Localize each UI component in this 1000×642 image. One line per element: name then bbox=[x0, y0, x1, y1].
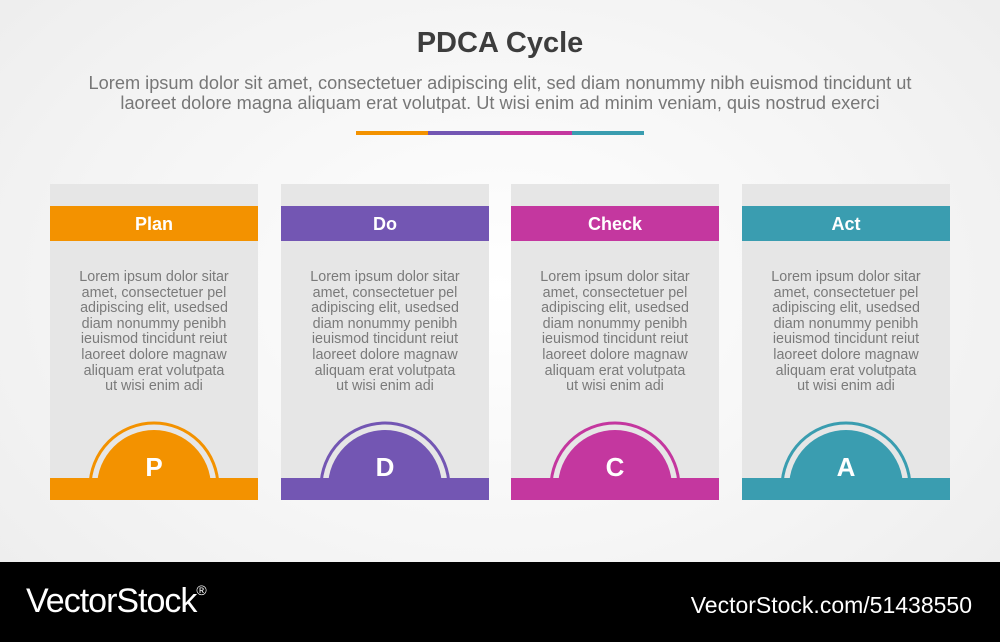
text: act: adipiscing elit, usedsed bbox=[772, 300, 920, 316]
text: plan: adipiscing elit, usedsed bbox=[80, 300, 228, 316]
text: check: ieuismod tincidunt reiut bbox=[542, 331, 688, 347]
panel: plan bbox=[50, 184, 258, 500]
panel: do bbox=[281, 184, 489, 500]
text: plan: amet, consectetuer pel bbox=[82, 285, 226, 301]
heading: act: Act bbox=[831, 214, 860, 234]
subtitle bbox=[89, 73, 912, 113]
text: do: aliquam erat volutpata bbox=[315, 363, 455, 379]
panel: act bbox=[742, 184, 950, 500]
text: do: Lorem ipsum dolor sitar bbox=[310, 269, 460, 285]
text: check: adipiscing elit, usedsed bbox=[541, 300, 689, 316]
text: act: ieuismod tincidunt reiut bbox=[773, 331, 919, 347]
text: plan: ieuismod tincidunt reiut bbox=[81, 331, 227, 347]
letter: C: C bbox=[606, 452, 624, 482]
heading: plan: Plan bbox=[135, 214, 173, 234]
text: plan bbox=[79, 269, 229, 394]
text: do bbox=[310, 269, 460, 394]
text: plan: diam nonummy penibh bbox=[82, 316, 226, 332]
panel: check bbox=[511, 184, 719, 500]
text: plan: Lorem ipsum dolor sitar bbox=[79, 269, 229, 285]
text: act: aliquam erat volutpata bbox=[776, 363, 916, 379]
letter: P: P bbox=[145, 452, 163, 482]
letter: D: D bbox=[376, 452, 394, 482]
text: check: amet, consectetuer pel bbox=[543, 285, 687, 301]
text: plan: laoreet dolore magnaw bbox=[81, 347, 227, 363]
text: do: ut wisi enim adi bbox=[336, 378, 434, 394]
footer logo: VectorStock® bbox=[26, 582, 206, 620]
text: do: adipiscing elit, usedsed bbox=[311, 300, 459, 316]
text: do: amet, consectetuer pel bbox=[313, 285, 457, 301]
color divider line bbox=[356, 131, 644, 135]
text: act: ut wisi enim adi bbox=[797, 378, 895, 394]
text: do: ieuismod tincidunt reiut bbox=[312, 331, 458, 347]
footer bar bbox=[0, 562, 1000, 642]
heading: check: Check bbox=[588, 214, 642, 234]
subtitle: Lorem ipsum dolor sit amet, consectetuer adipiscing elit, sed diam nonummy nibh euismod tincidunt ut bbox=[89, 73, 911, 93]
text: check: diam nonummy penibh bbox=[543, 316, 687, 332]
text: check: laoreet dolore magnaw bbox=[542, 347, 688, 363]
text: plan: ut wisi enim adi bbox=[105, 378, 203, 394]
text: check: Lorem ipsum dolor sitar bbox=[540, 269, 690, 285]
letter: A: A bbox=[837, 452, 855, 482]
text: act: Lorem ipsum dolor sitar bbox=[771, 269, 921, 285]
text: check: aliquam erat volutpata bbox=[545, 363, 685, 379]
subtitle: laoreet dolore magna aliquam erat volutpat. Ut wisi enim ad minim veniam, quis nostrud exerci bbox=[120, 93, 880, 113]
text: do: laoreet dolore magnaw bbox=[312, 347, 458, 363]
text: act bbox=[771, 269, 921, 394]
text: act: amet, consectetuer pel bbox=[774, 285, 918, 301]
text: plan: aliquam erat volutpata bbox=[84, 363, 224, 379]
footer id: VectorStock.com/51438550 bbox=[691, 592, 972, 618]
text: act: diam nonummy penibh bbox=[774, 316, 918, 332]
heading: do: Do bbox=[373, 214, 397, 234]
text: check bbox=[540, 269, 690, 394]
title: PDCA Cycle bbox=[417, 27, 583, 59]
text: act: laoreet dolore magnaw bbox=[773, 347, 919, 363]
text: check: ut wisi enim adi bbox=[566, 378, 664, 394]
text: do: diam nonummy penibh bbox=[313, 316, 457, 332]
